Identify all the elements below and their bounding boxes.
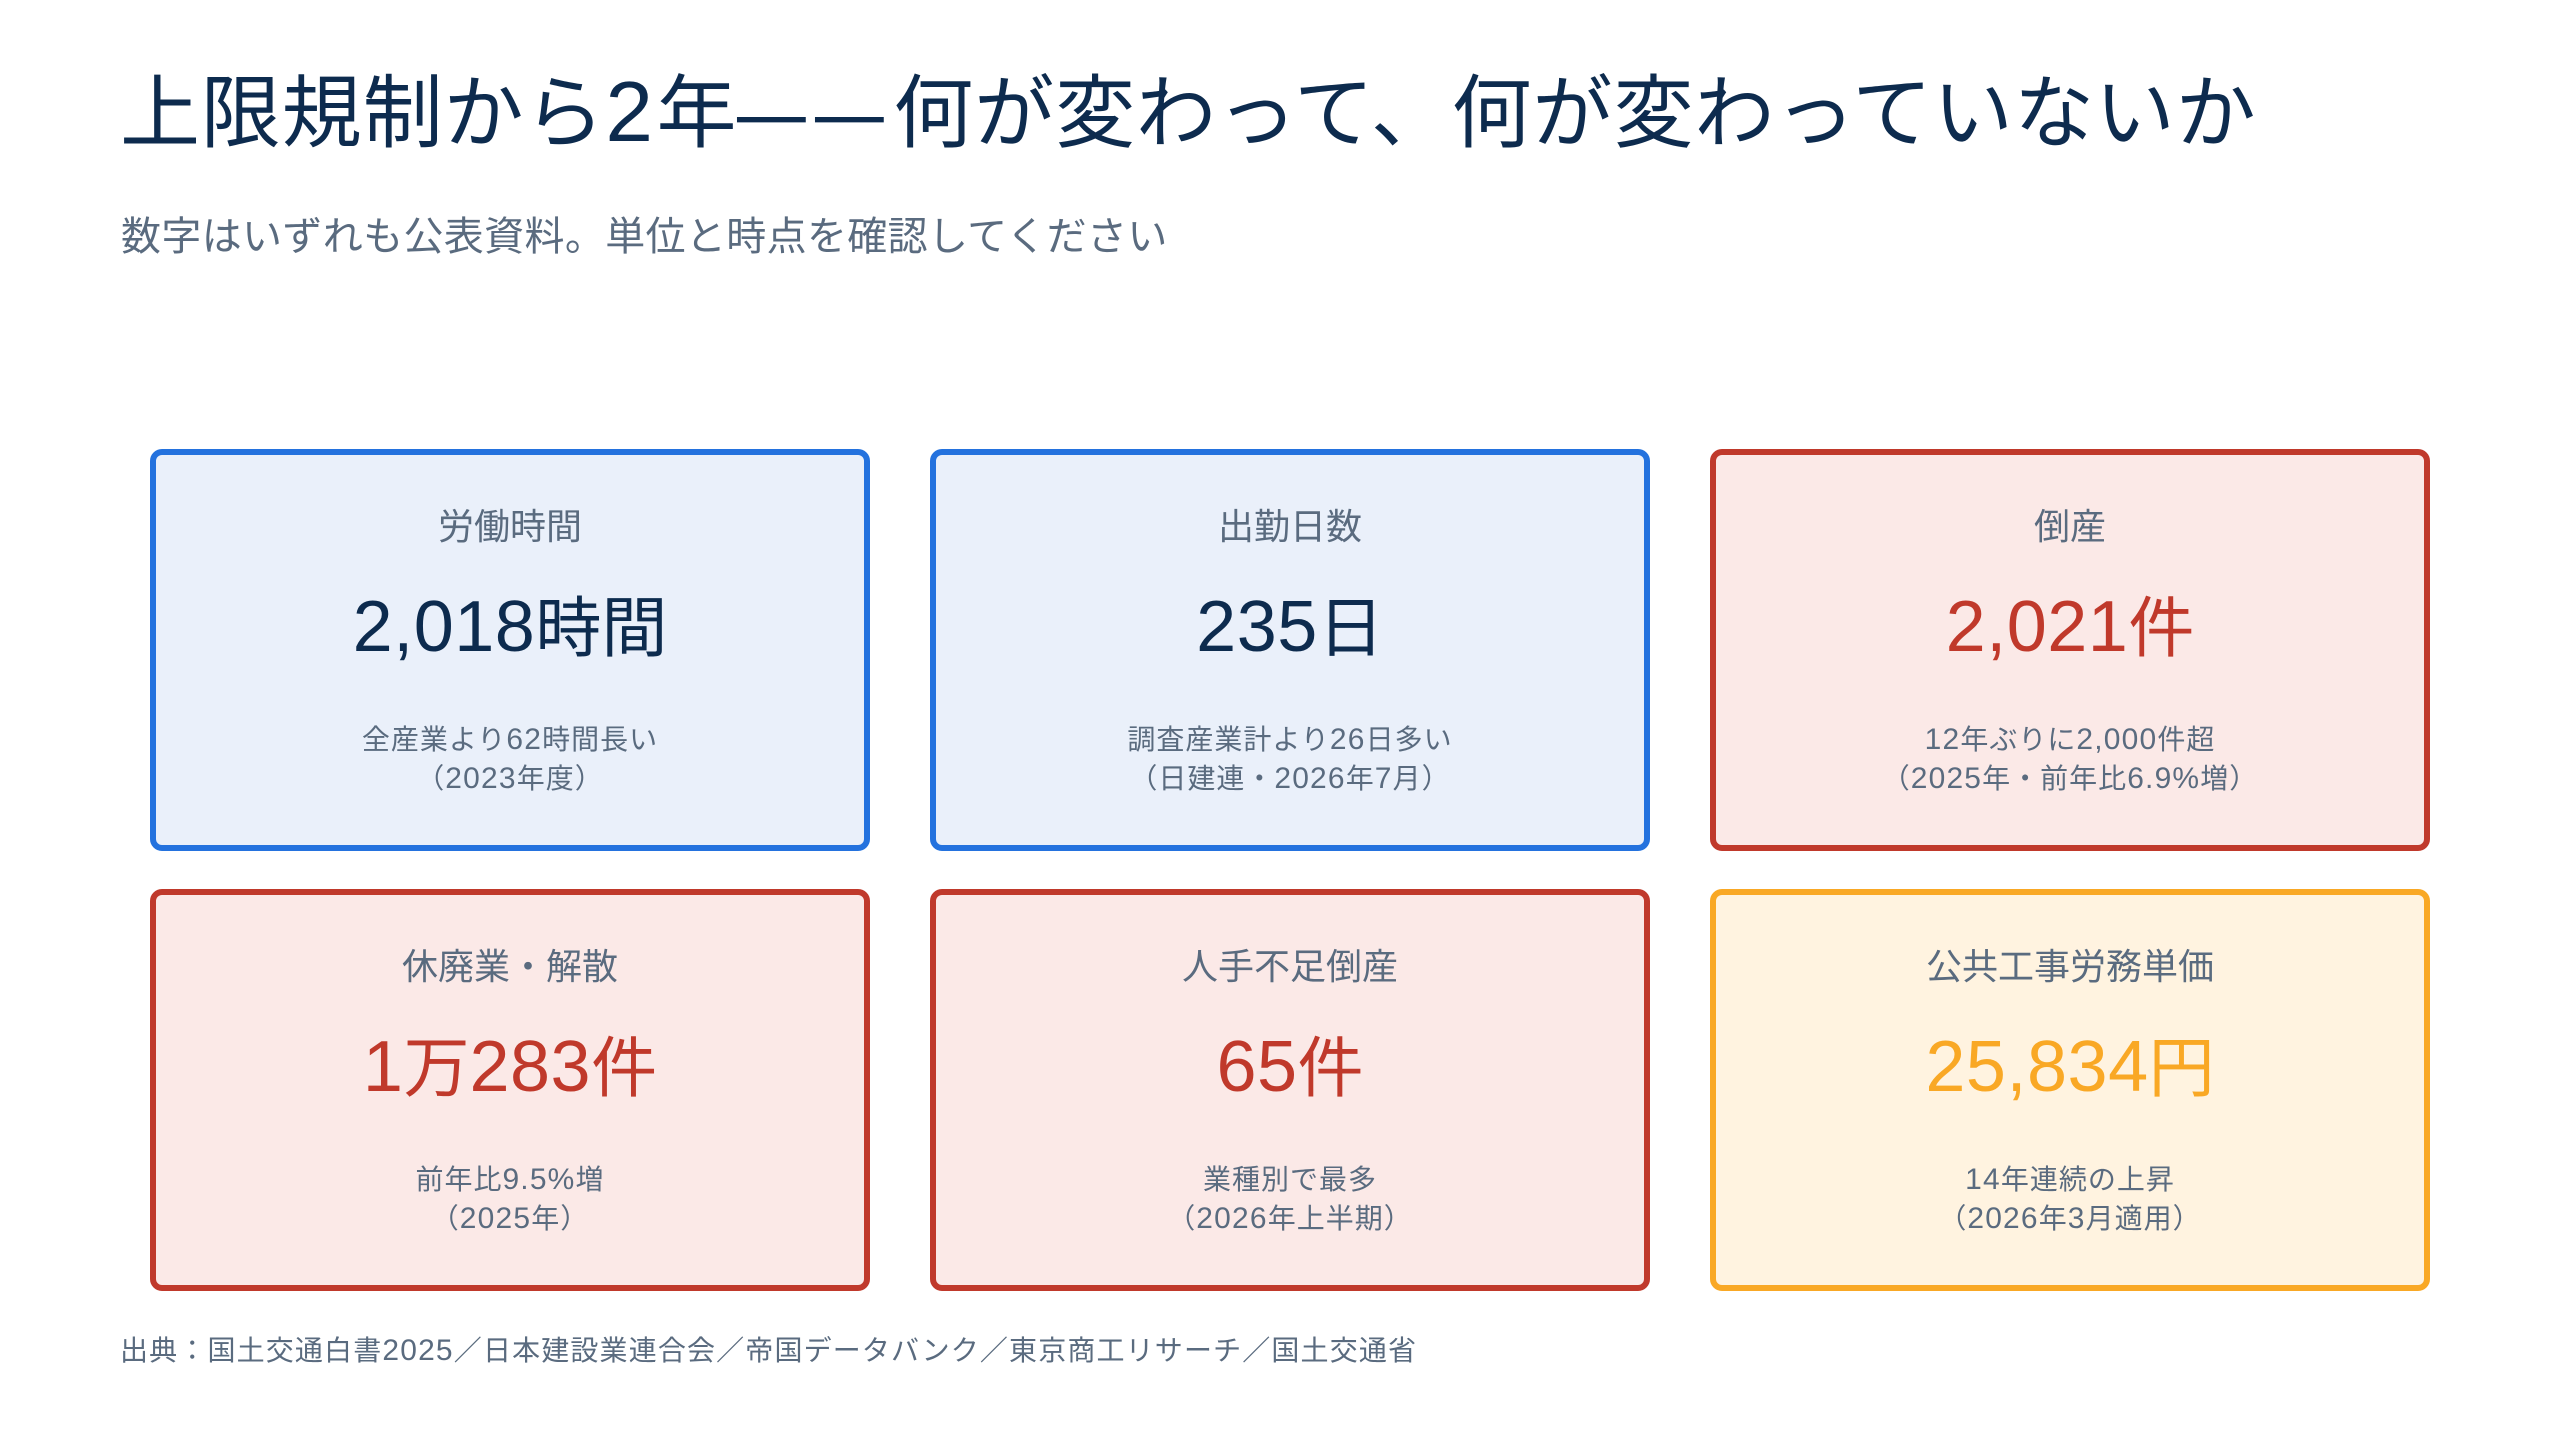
source note: 出典：国土交通白書2025／日本建設業連合会／帝国データバンク／東京商工リサーチ／国土交通省 xyxy=(120,1334,1417,1367)
value: 235日 xyxy=(1196,587,1384,667)
value: 65件 xyxy=(1216,1027,1364,1107)
panel: 人手不足倒産 xyxy=(930,889,1650,1291)
label: 労働時間 xyxy=(438,506,582,547)
description: （2025年） xyxy=(431,1202,589,1235)
description xyxy=(1167,1164,1413,1235)
description: 12年ぶりに2,000件超 xyxy=(1925,723,2215,756)
description: （2023年度） xyxy=(416,762,604,795)
value: 25,834円 xyxy=(1925,1027,2215,1107)
label: 休廃業・解散 xyxy=(402,946,618,987)
label: 倒産 xyxy=(2034,506,2106,547)
panel: 公共工事労務単価 xyxy=(1710,889,2430,1291)
description xyxy=(362,723,658,795)
value: 2,018時間 xyxy=(353,587,667,667)
label: 公共工事労務単価 xyxy=(1926,946,2214,987)
value: 1万283件 xyxy=(363,1027,657,1107)
description: （2026年上半期） xyxy=(1167,1202,1413,1235)
panel: 休廃業・解散 xyxy=(150,889,870,1291)
description xyxy=(415,1163,605,1235)
description xyxy=(1127,723,1453,795)
description: （日建連・2026年7月） xyxy=(1129,762,1451,795)
label: 出勤日数 xyxy=(1218,506,1362,547)
description: 14年連続の上昇 xyxy=(1965,1163,2175,1196)
panel: 労働時間 xyxy=(150,449,870,851)
description: 業種別で最多 xyxy=(1203,1164,1377,1195)
panel: 倒産 xyxy=(1710,449,2430,851)
label: 人手不足倒産 xyxy=(1182,946,1398,987)
description: （2026年3月適用） xyxy=(1938,1202,2202,1235)
description: （2025年・前年比6.9%増） xyxy=(1882,762,2258,795)
value: 2,021件 xyxy=(1946,587,2194,667)
description xyxy=(1938,1163,2202,1235)
description xyxy=(1882,723,2258,795)
panel: 出勤日数 xyxy=(930,449,1650,851)
subtitle: 数字はいずれも公表資料。単位と時点を確認してください xyxy=(121,215,1168,259)
description: 前年比9.5%増 xyxy=(415,1163,605,1196)
description: 全産業より62時間長い xyxy=(362,723,658,756)
description: 調査産業計より26日多い xyxy=(1127,723,1453,756)
title: 上限規制から2年——何が変わって、何が変わっていないか xyxy=(120,65,2257,160)
